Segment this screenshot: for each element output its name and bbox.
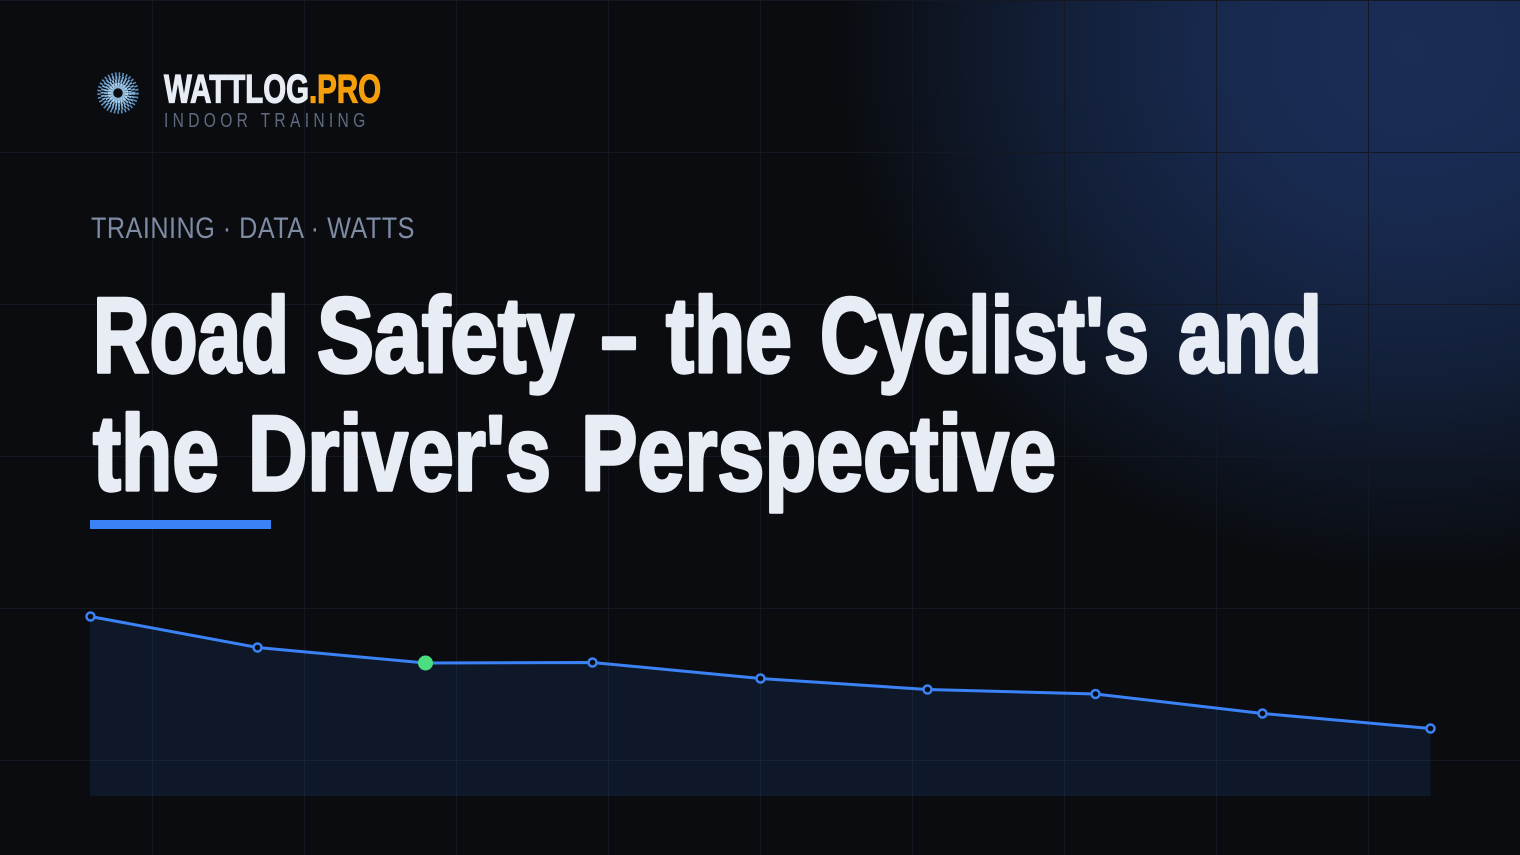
icon: cassette cog logo	[99, 74, 137, 112]
highlighted chart point	[418, 656, 433, 670]
logo wordmark: WATTLOG.PRO	[164, 68, 381, 112]
title: Driver's	[248, 393, 551, 513]
chart points	[86, 612, 1434, 732]
title: –	[601, 275, 637, 395]
title: the	[666, 275, 792, 395]
logo subtitle: INDOOR TRAINING	[164, 109, 365, 131]
eyebrow tagline: TRAINING · DATA · WATTS	[91, 211, 414, 244]
title accent bar	[90, 520, 271, 529]
title: Perspective	[581, 393, 1056, 513]
chart line	[90, 616, 1430, 728]
title: the	[93, 393, 219, 513]
title: Road	[93, 275, 289, 395]
chart area fill	[90, 616, 1430, 796]
title: and	[1178, 275, 1322, 395]
line chart	[86, 612, 1434, 796]
title: Cyclist's	[820, 275, 1149, 395]
title	[93, 275, 1322, 513]
title: Safety	[317, 275, 574, 395]
